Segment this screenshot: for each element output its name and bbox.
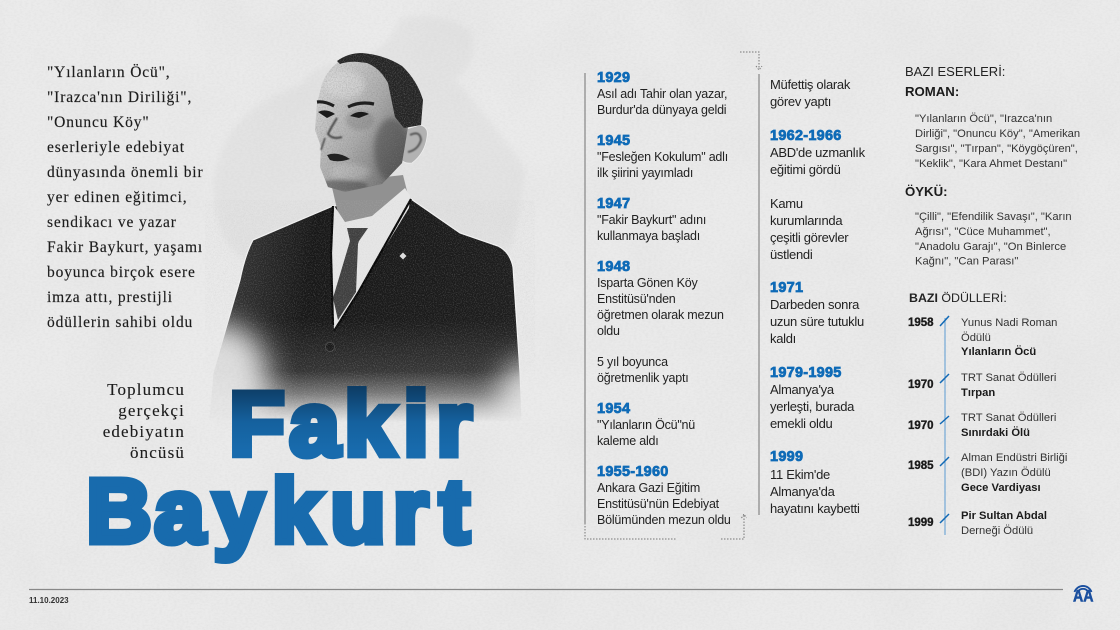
entry 1929: Burdur'da dünyaya geldi: [597, 103, 726, 117]
award 1970 Sınırdaki Ölü: TRT Sanat Ödülleri: [961, 412, 1056, 424]
entry 1929: [597, 70, 727, 117]
entry 1999: [770, 449, 860, 516]
entry 1954: [597, 401, 695, 448]
entry 1947: kullanmaya başladı: [597, 229, 700, 243]
jacket button: [326, 342, 334, 352]
column 2 rule: [758, 74, 760, 515]
award 1999: Derneği Ödülü: [961, 525, 1033, 537]
entry 1999: 1999: [770, 449, 803, 465]
column 1 rule: [584, 73, 586, 523]
hair: [337, 53, 423, 128]
awards heading: BAZI ÖDÜLLERİ:: [909, 291, 1007, 305]
entry 1979-1995: emekli oldu: [770, 416, 833, 431]
entry 1971: kaldı: [770, 331, 796, 346]
portrait photo: [205, 50, 535, 440]
eyebrows: [317, 102, 374, 107]
award 1958: Ödülü: [961, 332, 991, 344]
award 1985: Gece Vardiyası: [961, 482, 1041, 494]
entry 1947: "Fakir Baykurt" adını: [597, 213, 706, 227]
entry 1962-1966: 1962-1966: [770, 128, 842, 144]
entry 1954: 1954: [597, 401, 630, 417]
award 1970 Sınırdaki Ölü: Sınırdaki Ölü: [961, 426, 1030, 439]
entry 1945: ilk şiirini yayımladı: [597, 166, 693, 180]
panel: awards: [908, 291, 1067, 537]
panel: works: [905, 64, 1080, 268]
award 1999: 1999: [908, 517, 934, 529]
intro paragraph: boyunca birçok esere: [47, 264, 196, 281]
intro paragraph: ödüllerin sahibi oldu: [47, 314, 193, 331]
entry 1971: Darbeden sonra: [770, 297, 860, 312]
intro paragraph: "Irazca'nın Diriliği",: [47, 89, 192, 106]
intro paragraph: yer edinen eğitimci,: [47, 189, 188, 206]
entry teaching: öğretmenlik yaptı: [597, 371, 688, 385]
entry 1955-1960: Bölümünden mezun oldu: [597, 513, 731, 527]
intro paragraph: imza attı, prestijli: [47, 289, 173, 306]
title: Fakir Baykurt: Baykurt: [86, 462, 469, 562]
entry 1945: "Fesleğen Kokulum" adlı: [597, 150, 728, 164]
stories list: "Anadolu Garajı", "On Binlerce: [915, 241, 1066, 253]
entry public posts: üstlendi: [770, 247, 813, 262]
entry teaching: 5 yıl boyunca: [597, 355, 668, 369]
novels list: [915, 113, 1080, 170]
entry 1955-1960: 1955-1960: [597, 464, 669, 480]
stories heading: ÖYKÜ:: [905, 184, 948, 199]
mouth: [327, 154, 350, 161]
intro paragraph: [47, 64, 203, 331]
awards timeline axis: [944, 318, 946, 535]
entry public posts: [770, 196, 849, 262]
award 1985: Alman Endüstri Birliği: [961, 452, 1067, 464]
dotted connector arrow bottom: [585, 514, 746, 539]
entry 1955-1960: Enstitüsü'nün Edebiyat: [597, 497, 720, 511]
works heading: BAZI ESERLERİ:: [905, 64, 1005, 79]
nose shadow: [328, 118, 342, 138]
timeline column 2: [759, 74, 866, 516]
entry 1948: [597, 259, 724, 338]
intro paragraph: "Yılanların Öcü",: [47, 64, 171, 81]
novels list: Dirliği", "Onuncu Köy", "Amerikan: [915, 128, 1080, 140]
award 1958: Yunus Nadi Roman: [961, 317, 1057, 329]
entry 1948: öğretmen olarak mezun: [597, 308, 724, 322]
dotted connector arrow top: [740, 52, 762, 70]
entry 1954: kaleme aldı: [597, 434, 659, 448]
award 1999: Pir Sultan Abdal: [961, 510, 1047, 522]
entry 1929: Asıl adı Tahir olan yazar,: [597, 87, 727, 101]
award 1970 Tırpan: [908, 372, 1056, 399]
entry 1947: [597, 196, 706, 243]
stories list: Ağrısı", "Cüce Muhammet",: [915, 226, 1051, 238]
award 1970 Tırpan: TRT Sanat Ödülleri: [961, 372, 1056, 384]
date: 11.10.2023: [29, 596, 69, 605]
lapel pin: [399, 252, 407, 260]
novels list: Sargısı", "Tırpan", "Köygöçüren",: [915, 143, 1078, 155]
award 1985: (BDI) Yazın Ödülü: [961, 467, 1051, 479]
suit jacket: [212, 198, 521, 420]
stories list: "Çilli", "Efendilik Savaşı", "Karın: [915, 211, 1072, 223]
award 1985: 1985: [908, 460, 934, 472]
necktie: [333, 228, 368, 320]
entry 1954: "Yılanların Öcü"nü: [597, 418, 695, 432]
suit grain: [206, 200, 535, 408]
intro paragraph: sendikacı ve yazar: [47, 214, 177, 231]
entry 1948: oldu: [597, 324, 620, 338]
award 1958: 1958: [908, 317, 934, 329]
novels list: "Keklik", "Kara Ahmet Destanı": [915, 158, 1067, 170]
entry 1948: 1948: [597, 259, 630, 275]
shirt collar: [331, 188, 410, 330]
watercolor blob behind portrait: [214, 16, 525, 270]
entry 1979-1995: [770, 365, 855, 431]
hair grain: [338, 53, 423, 128]
logo: AA: AA: [1073, 586, 1094, 606]
subtitle: edebiyatın: [103, 422, 185, 441]
entry 1962-1966: ABD'de uzmanlık: [770, 145, 866, 160]
entry inspector: Müfettiş olarak: [770, 77, 851, 92]
entry 1945: [597, 133, 728, 180]
intro paragraph: Fakir Baykurt, yaşamı: [47, 239, 203, 256]
entry 1979-1995: 1979-1995: [770, 365, 842, 381]
novels heading: ROMAN:: [905, 84, 959, 99]
award 1970 Tırpan: 1970: [908, 379, 934, 391]
ear inner shadow: [408, 133, 421, 152]
entry teaching: [597, 355, 688, 385]
entry 1945: 1945: [597, 133, 630, 149]
entry public posts: Kamu: [770, 196, 803, 211]
entry 1962-1966: eğitimi gördü: [770, 162, 841, 177]
entry 1971: [770, 280, 864, 346]
entry public posts: kurumlarında: [770, 213, 843, 228]
entry 1955-1960: Ankara Gazi Eğitim: [597, 481, 700, 495]
ear: [400, 125, 427, 163]
cheek line: [321, 138, 325, 150]
entry 1999: hayatını kaybetti: [770, 501, 860, 516]
entry 1962-1966: [770, 128, 866, 177]
title: Fakir Baykurt: Fakir: [230, 375, 472, 475]
entry 1971: 1971: [770, 280, 803, 296]
award 1958: Yılanların Öcü: [961, 345, 1036, 358]
footer rule: [29, 588, 1063, 590]
entry 1948: Enstitüsü'nden: [597, 292, 676, 306]
award 1970 Sınırdaki Ölü: 1970: [908, 420, 934, 432]
entry 1948: Isparta Gönen Köy: [597, 276, 698, 290]
entry 1979-1995: yerleşti, burada: [770, 399, 855, 414]
novels list: "Yılanların Öcü", "Irazca'nın: [915, 113, 1052, 125]
neck: [331, 175, 408, 222]
eyes: [318, 110, 369, 118]
face: [315, 58, 408, 192]
entry 1955-1960: [597, 464, 731, 527]
stories list: Kağnı", "Can Parası": [915, 256, 1018, 268]
lapel lines: [331, 199, 411, 331]
intro paragraph: "Onuncu Köy": [47, 114, 150, 131]
subtitle: Toplumcu: [107, 380, 185, 399]
award 1970 Sınırdaki Ölü: [908, 412, 1056, 439]
entry 1947: 1947: [597, 196, 630, 212]
intro paragraph: eserleriyle edebiyat: [47, 139, 185, 156]
stories list: [915, 211, 1072, 268]
title: Fakir Baykurt: [86, 375, 472, 562]
entry inspector: görev yaptı: [770, 94, 831, 109]
subtitle: [103, 380, 185, 462]
entry 1999: Almanya'da: [770, 484, 836, 499]
subtitle: gerçekçi: [118, 401, 185, 420]
face shading: [315, 62, 408, 192]
entry 1929: 1929: [597, 70, 630, 86]
timeline column 1: [585, 70, 731, 527]
intro paragraph: dünyasında önemli bir: [47, 164, 203, 181]
subtitle: öncüsü: [130, 443, 185, 462]
award 1958: [908, 316, 1057, 358]
entry inspector: [770, 77, 851, 109]
entry 1971: uzun süre tutuklu: [770, 314, 864, 329]
award 1970 Tırpan: Tırpan: [961, 387, 995, 399]
entry 1979-1995: Almanya'ya: [770, 382, 835, 397]
entry public posts: çeşitli görevler: [770, 230, 849, 245]
award 1999: [908, 510, 1047, 537]
award 1985: [908, 452, 1067, 494]
entry 1999: 11 Ekim'de: [770, 467, 830, 482]
